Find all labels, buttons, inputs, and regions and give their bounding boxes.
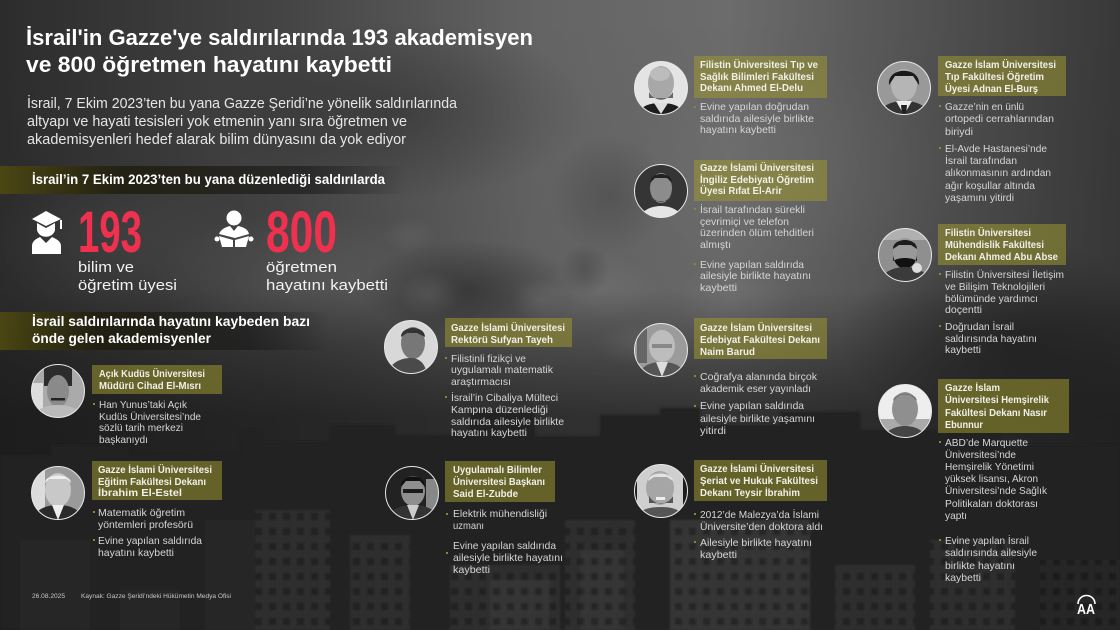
name box: Rektörü Sufyan Tayeh [451, 334, 553, 346]
bullet list: hayatını kaybetti [700, 124, 776, 136]
bullet list: yüksek lisansı, Akron [945, 473, 1038, 485]
bullet list: uygulamalı matematik [451, 364, 554, 376]
bullet list: kaybetti [453, 564, 490, 576]
bullet list: ailesiyle birlikte yaşamını [700, 413, 815, 425]
panel: Ahmed El-Delu [634, 56, 827, 136]
intro paragraph: altyapı ve hayati tesisleri yok etmenin yanı sıra öğretmen ve [27, 114, 407, 130]
bullet list: Doğrudan İsrail [945, 320, 1014, 333]
bullet list: Evine yapılan doğrudan [700, 101, 809, 113]
bullet list: Elektrik mühendisliği [453, 508, 547, 520]
logo: AA [1077, 596, 1095, 618]
bullet list: Üniversite’den doktora aldı [700, 521, 823, 533]
portrait [634, 164, 688, 218]
name box: Ebunnur [945, 419, 983, 431]
panel: Rıfat El-Arir [634, 160, 827, 294]
name box: Gazze İslami Üniversitesi [451, 321, 565, 334]
name box: Uygulamalı Bilimler [453, 464, 542, 476]
bullet list: başkanıydı [99, 434, 148, 446]
bullet list [939, 268, 1064, 356]
name box: Tıp Fakültesi Öğretim [945, 70, 1044, 83]
name box [445, 318, 572, 347]
intro paragraph: İsrail, 7 Ekim 2023’ten bu yana Gazze Şeridi’ne yönelik saldırılarında [27, 94, 458, 112]
portrait [31, 466, 85, 520]
bullet list: ortopedi cerrahlarından [945, 113, 1054, 125]
bullet list: çevrimiçi ve telefon [700, 216, 789, 228]
label [266, 260, 388, 294]
bullet list: araştırmacısı [451, 376, 511, 388]
icon: teacher with book [214, 210, 254, 247]
bullet list: kaybetti [945, 344, 981, 356]
bullet list: sözlü tarih merkezi [99, 422, 183, 434]
bullet list: Politikaları doktorası [945, 498, 1038, 510]
name box: Eğitim Fakültesi Dekanı [98, 476, 206, 488]
name box: Filistin Üniversitesi Tıp ve [700, 58, 818, 71]
name box: Gazze İslami Üniversitesi [98, 463, 212, 476]
bullet list: kaybetti [945, 572, 981, 584]
bullet list: Filistinli fizikçi ve [451, 353, 526, 365]
bullet list: yaptı [945, 510, 967, 522]
bullet list: Kampına düzenlediği [451, 404, 548, 416]
bullet list [694, 508, 823, 561]
name box: Fakültesi Dekanı Nasır [945, 407, 1047, 419]
bullet list: Üniversitesi’nde [945, 449, 1016, 461]
name box [92, 461, 222, 500]
panel: Nasır Ebunnur [878, 379, 1069, 584]
panel: Adnan El-Burş [877, 56, 1066, 204]
name box: Üniversitesi Hemşirelik [945, 393, 1049, 406]
bullet list: Evine yapılan saldırıda [700, 259, 804, 271]
name box [694, 160, 827, 201]
bullet list: Hemşirelik Yönetimi [945, 461, 1034, 473]
bullet list [694, 101, 814, 136]
heading band: attacks since 7 October: İsrail’in 7 Ekim 2023’ten bu yana düzenlediği saldırılarda [32, 172, 385, 187]
bullet list: ve Bilişim Teknolojileri [945, 281, 1045, 293]
footer: date and source: Kaynak: Gazze Şeridi’ndeki Hükümetin Medya Ofisi [81, 593, 231, 600]
bullet list: hayatını kaybetti [451, 427, 527, 439]
bullet list: ABD’de Marquette [945, 437, 1028, 449]
bullet list: Üniversitesi’nde Sağlık [945, 485, 1048, 497]
name box: Filistin Üniversitesi [945, 226, 1031, 239]
bullet list: almıştı [700, 239, 731, 251]
portrait [878, 228, 932, 282]
name box: Dekanı Ahmed El-Delu [700, 82, 803, 94]
bullet list: hayatını kaybetti [98, 547, 174, 559]
panel: Teysir İbrahim [634, 460, 827, 561]
portrait [634, 323, 688, 377]
label: öğretim üyesi [78, 278, 177, 294]
bullet list: ağır koşullar altında [945, 180, 1035, 192]
name box: İngiliz Edebiyatı Öğretim [700, 173, 814, 186]
name box [92, 365, 222, 394]
bullet list [694, 203, 814, 294]
bullet list: Evine yapılan İsrail [945, 534, 1029, 547]
bullet list: biriydi [945, 126, 973, 138]
bullet list: bölümünde yardımcı [945, 293, 1038, 305]
name box: Dekanı Teysir İbrahim [700, 486, 800, 499]
name box [938, 56, 1066, 96]
heading band: prominent academics [0, 312, 330, 350]
panel: Said El-Zubde [385, 461, 563, 576]
name box: Edebiyat Fakültesi Dekanı [700, 334, 820, 346]
title: ve 800 öğretmen hayatını kaybetti [26, 52, 392, 77]
bullet list: İsrail tarafından sürekli [700, 203, 805, 216]
label: bilim ve [78, 260, 134, 276]
bullet list: yaşamını yitirdi [945, 192, 1014, 204]
panel: Sufyan Tayeh [384, 318, 572, 439]
portrait [634, 61, 688, 115]
bullet list: Han Yunus’taki Açık [99, 399, 188, 411]
portrait [634, 464, 688, 518]
name box: Dekanı Ahmed Abu Abse [945, 251, 1058, 263]
bullet list: Kudüs Üniversitesi’nde [99, 411, 201, 423]
bullet list: Evine yapılan saldırıda [98, 535, 202, 547]
heading band: prominent academics: İsrail saldırılarında hayatını kaybeden bazı [32, 314, 310, 329]
bullet list: Gazze’nin en ünlü [945, 101, 1024, 113]
name box [445, 461, 555, 502]
title [26, 25, 533, 77]
bullet list: İsrail’in Cibaliya Mülteci [451, 391, 558, 404]
bullet list: uzmanı [453, 520, 484, 532]
bullet list: Filistin Üniversitesi İletişim [945, 268, 1064, 281]
bullet list: saldırıda ailesiyle birlikte [451, 416, 564, 428]
bullet list: birlikte hayatını [945, 560, 1015, 572]
panel: Naim Barud [634, 318, 827, 437]
intro paragraph: akademisyenleri hedef alarak bilim dünyasını da yok ediyor [27, 132, 406, 148]
panel: İbrahim El-Estel [31, 461, 222, 559]
bullet list: yöntemleri profesörü [98, 519, 193, 531]
bullet list [445, 353, 564, 439]
bullet list: kaybetti [700, 549, 737, 561]
portrait [384, 320, 438, 374]
label [78, 260, 177, 294]
portrait [878, 384, 932, 439]
name box: Müdürü Cihad El-Mısrı [99, 380, 201, 392]
bullet list [93, 399, 201, 446]
bullet list: alıkonmasının ardından [945, 167, 1051, 179]
bullet list: saldırıda ailesiyle birlikte [700, 113, 814, 125]
bullet list: akademik eser yayınladı [700, 383, 811, 395]
number 800: 800 [266, 200, 337, 265]
heading band: attacks since 7 October [0, 166, 405, 194]
name box: Gazze İslam Üniversitesi [700, 321, 812, 334]
name box: Üniversitesi Başkanı [453, 475, 545, 488]
name box: Gazze İslam Üniversitesi [945, 58, 1056, 71]
name box: Gazze İslami Üniversitesi [700, 462, 814, 475]
name box [938, 224, 1066, 265]
bullet list: 2012’de Malezya’da İslami [700, 508, 819, 521]
portrait [385, 466, 440, 520]
name box: İbrahim El-Estel [98, 486, 182, 499]
footer: date and source: 26.08.2025 [32, 593, 65, 600]
bullet list [939, 101, 1054, 204]
panel: Cihad El-Mısrı [31, 364, 222, 446]
name box: Şeriat ve Hukuk Fakültesi [700, 475, 818, 487]
icon: graduate [32, 211, 62, 254]
bullet list: İsrail tarafından [945, 154, 1017, 167]
bullet list: Matematik öğretim [98, 507, 185, 519]
statistic: 193 academics [32, 200, 177, 294]
bullet list: Ailesiyle birlikte hayatını [700, 537, 812, 549]
name box: Üyesi Adnan El-Burş [945, 82, 1038, 95]
bullet list: El-Avde Hastanesi’nde [945, 143, 1047, 155]
name box: Said El-Zubde [453, 488, 518, 500]
bullet list: ailesiyle birlikte hayatını [700, 270, 811, 282]
bullet list: kaybetti [700, 282, 737, 294]
bullet list: ailesiyle birlikte hayatını [453, 552, 563, 564]
name box [938, 379, 1069, 433]
bullet list: saldırısında ailesiyle [945, 547, 1037, 559]
label: hayatını kaybetti [266, 278, 388, 294]
name box: Sağlık Bilimleri Fakültesi [700, 71, 814, 83]
bullet list [939, 437, 1048, 584]
bullet list: Evine yapılan saldırıda [700, 400, 804, 412]
bullet list: Evine yapılan saldırıda [453, 540, 556, 552]
name box: Naim Barud [700, 346, 755, 358]
bullet list: saldırısında hayatını [945, 333, 1037, 345]
name box: Gazze İslam [945, 381, 1000, 394]
bullet list: yitirdi [700, 425, 726, 437]
portrait [877, 61, 931, 115]
logo: AA: AA [1077, 601, 1095, 618]
intro paragraph [27, 94, 458, 148]
heading band: prominent academics: önde gelen akademisyenler [32, 331, 212, 346]
portrait [31, 364, 85, 418]
name box [694, 56, 827, 98]
name box: Gazze İslami Üniversitesi [700, 161, 814, 174]
bullet list [93, 507, 202, 559]
bullet list: üzerinden ölüm tehditleri [700, 227, 814, 239]
number 193: 193 [78, 200, 142, 265]
bullet list: doçentti [945, 304, 982, 316]
bullet list [446, 508, 563, 576]
name box: Açık Kudüs Üniversitesi [99, 367, 205, 380]
statistic: 800 teachers [214, 200, 388, 294]
bullet list: Coğrafya alanında birçok [700, 371, 818, 383]
name box [694, 318, 827, 359]
bullet list [694, 371, 818, 437]
panel: Ahmed Abu Abse [878, 224, 1066, 356]
name box [694, 460, 827, 501]
name box: Üyesi Rıfat El-Arir [700, 184, 782, 197]
title: İsrail'in Gazze'ye saldırılarında 193 akademisyen [26, 25, 533, 50]
name box: Mühendislik Fakültesi [945, 239, 1044, 251]
label: öğretmen [266, 260, 337, 276]
